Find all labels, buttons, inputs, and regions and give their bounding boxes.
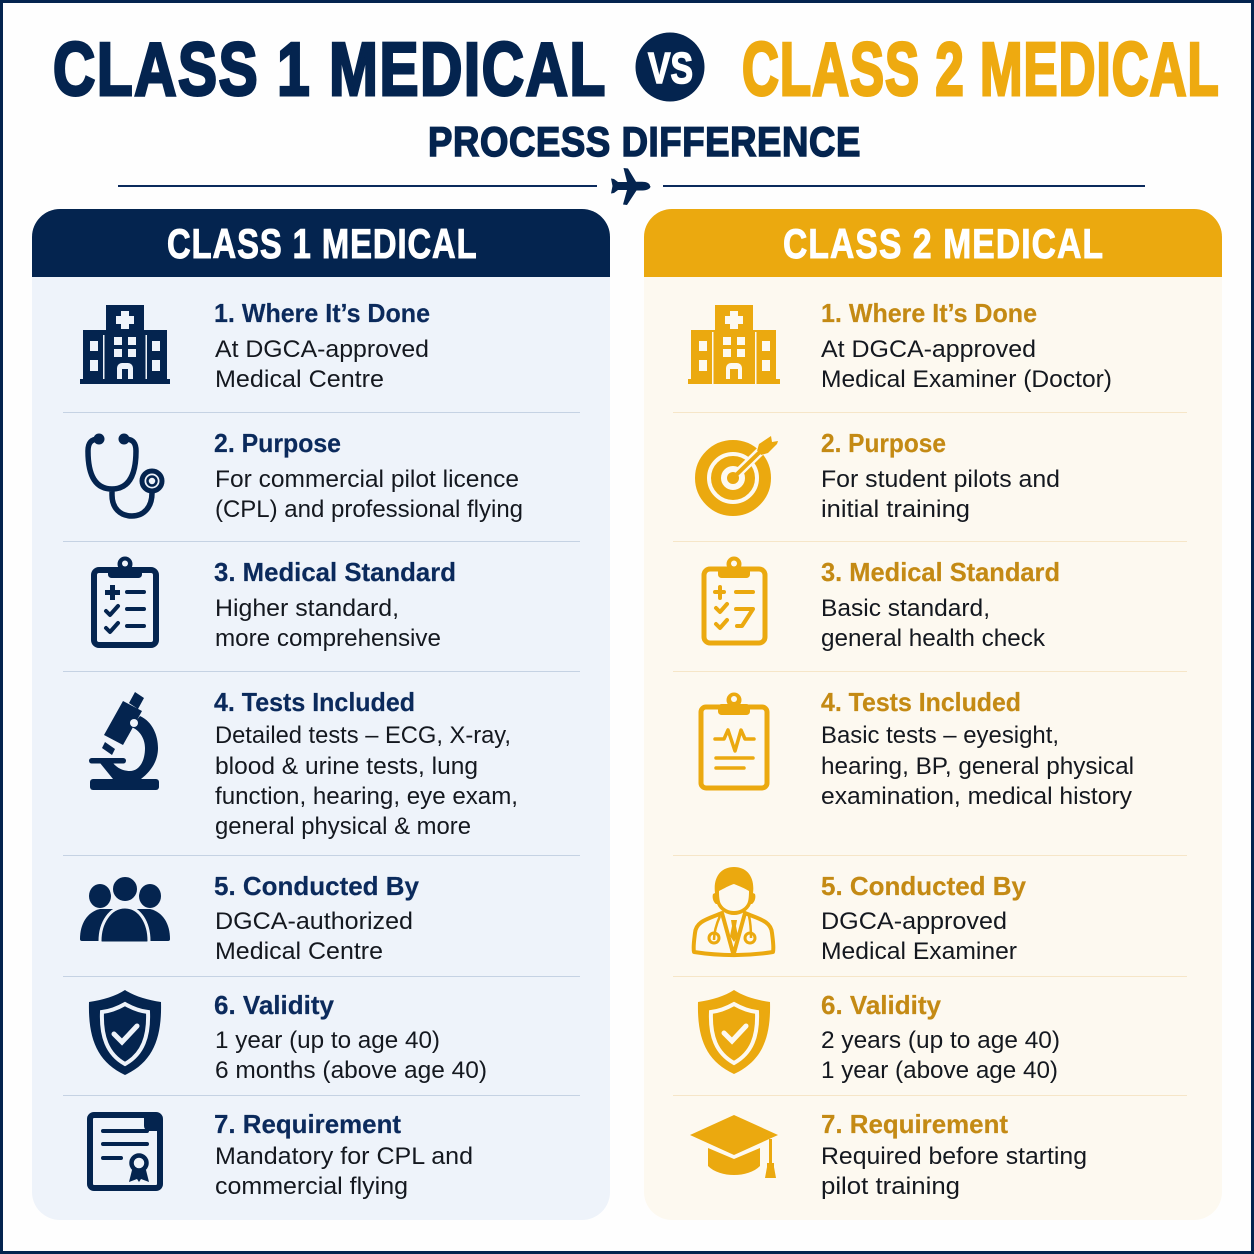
row 6: validity: 1 year (up to age 40) (215, 1027, 440, 1054)
row 4: tests included: 4. Tests Included (214, 687, 415, 717)
badge: vs (636, 32, 704, 102)
panel: class 1 medical (32, 209, 610, 1220)
row 7: requirement: commercial flying (215, 1173, 408, 1200)
row 3: medical standard: 3. Medical Standard (214, 557, 456, 587)
row 1: where it's done: At DGCA-approved (215, 336, 429, 363)
icon: shield with check (698, 990, 770, 1074)
row 4: tests included: 4. Tests Included (821, 687, 1021, 717)
row 4: tests included: general physical & more (215, 813, 471, 840)
row 4: tests included: blood & urine tests, lung (215, 753, 478, 780)
icon: stethoscope (88, 434, 162, 516)
panel header: class 2 (644, 209, 1222, 277)
row 4: tests included (89, 687, 518, 840)
row 7: requirement: 7. Requirement (214, 1109, 401, 1139)
row 4: tests included: Detailed tests – ECG, X-ray, (215, 722, 511, 749)
row 3: medical standard: general health check (821, 625, 1046, 652)
row 5: conducted by: DGCA-authorized (215, 908, 413, 935)
row 5: conducted by (694, 867, 1027, 965)
row 4: tests included: hearing, BP, general physical (821, 753, 1134, 780)
row 2: purpose: For student pilots and (821, 466, 1060, 493)
icon: hospital (80, 305, 170, 384)
row 7: requirement: pilot training (821, 1173, 960, 1200)
panel header: class 2: CLASS 2 MEDICAL (783, 222, 1103, 268)
row 3: medical standard (704, 556, 1060, 652)
icon: hospital (688, 305, 780, 384)
row 2: purpose: initial training (821, 496, 970, 523)
icon: certificate (90, 1114, 160, 1188)
row 6: validity: 6 months (above age 40) (215, 1057, 487, 1084)
row 2: purpose: 2. Purpose (821, 428, 946, 458)
row 2: purpose: 2. Purpose (214, 428, 341, 458)
row 4: tests included: Basic tests – eyesight, (821, 722, 1059, 749)
row 6: validity: 6. Validity (214, 990, 335, 1020)
icon: shield with check (89, 990, 161, 1075)
row 2: purpose (88, 428, 523, 523)
panel header: class 1: CLASS 1 MEDICAL (167, 220, 477, 267)
row 5: conducted by: 5. Conducted By (821, 871, 1027, 901)
panel header: class 1 (32, 209, 610, 277)
row 5: conducted by: 5. Conducted By (214, 871, 420, 901)
icon: airplane (611, 168, 650, 205)
row 5: conducted by (80, 871, 420, 965)
icon: clipboard checklist (704, 556, 765, 643)
row 1: where it's done (688, 298, 1112, 393)
icon: clipboard with heartbeat (701, 692, 767, 788)
row 3: medical standard: 3. Medical Standard (821, 557, 1060, 587)
row 2: purpose (701, 428, 1060, 523)
row 6: validity (698, 990, 1060, 1084)
subtitle: PROCESS DIFFERENCE (428, 119, 860, 166)
panel: class 2 medical (644, 209, 1222, 1220)
row 1: where it's done: 1. Where It’s Done (214, 298, 430, 328)
row 5: conducted by: Medical Examiner (821, 938, 1017, 965)
row 7: requirement (690, 1109, 1087, 1200)
row 1: where it's done: 1. Where It’s Done (821, 298, 1037, 328)
row 6: validity: 2 years (up to age 40) (821, 1027, 1060, 1054)
icon: target with arrow (701, 435, 778, 510)
row 7: requirement (90, 1109, 473, 1200)
row 6: validity: 1 year (above age 40) (821, 1057, 1058, 1084)
row 4: tests included (701, 687, 1134, 810)
row 3: medical standard: Higher standard, (215, 595, 399, 622)
row 2: purpose: (CPL) and professional flying (215, 496, 523, 523)
row 3: medical standard: Basic standard, (821, 595, 990, 622)
row 4: tests included: function, hearing, eye exam, (215, 783, 518, 810)
row 3: medical standard (94, 556, 456, 652)
icon: clipboard checklist (94, 556, 156, 645)
row 1: where it's done: Medical Examiner (Doctor) (821, 366, 1112, 393)
row 1: where it's done: At DGCA-approved (821, 336, 1036, 363)
icon: doctor (694, 867, 773, 955)
row 5: conducted by: Medical Centre (215, 938, 383, 965)
row 2: purpose: For commercial pilot licence (215, 466, 519, 493)
row 7: requirement: Required before starting (821, 1143, 1087, 1170)
title: class 1 medical: CLASS 1 MEDICAL (53, 28, 605, 112)
row 1: where it's done: Medical Centre (215, 366, 384, 393)
title: class 2 medical: CLASS 2 MEDICAL (742, 27, 1219, 111)
row 4: tests included: examination, medical history (821, 783, 1132, 810)
icon: group of people (80, 876, 170, 943)
row 3: medical standard: more comprehensive (215, 625, 441, 652)
icon: microscope (89, 692, 159, 790)
row 5: conducted by: DGCA-approved (821, 908, 1007, 935)
row 7: requirement: 7. Requirement (821, 1109, 1008, 1139)
row 7: requirement: Mandatory for CPL and (215, 1143, 473, 1170)
row 6: validity (89, 990, 487, 1084)
row 1: where it's done (80, 298, 430, 393)
badge: vs: VS (648, 44, 693, 93)
row 6: validity: 6. Validity (821, 990, 942, 1020)
icon: graduation cap (690, 1115, 778, 1178)
